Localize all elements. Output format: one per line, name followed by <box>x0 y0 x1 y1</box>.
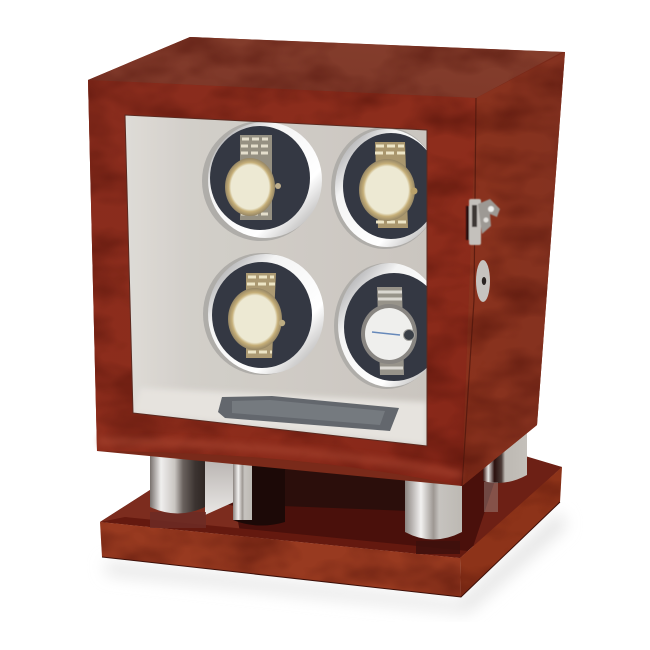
crown <box>275 183 281 189</box>
watch bracelet <box>375 142 408 228</box>
chrome ring <box>338 263 426 387</box>
winder top right <box>331 128 426 249</box>
watch face <box>228 288 282 350</box>
ring shadow <box>334 263 416 389</box>
background seen under cabinet <box>205 458 234 515</box>
cabinet top face <box>88 37 562 98</box>
latch dark detail <box>472 205 477 227</box>
base top face <box>100 463 562 558</box>
base top front lip <box>100 517 468 558</box>
watch bracelet <box>246 273 276 358</box>
plate <box>476 260 490 302</box>
window edge <box>125 115 427 446</box>
chrome ring <box>208 122 322 238</box>
post: front right <box>405 476 462 540</box>
watch bracelet <box>240 135 272 220</box>
chrome ring <box>208 254 324 374</box>
post: back right reflection <box>484 482 498 512</box>
keyhole <box>482 277 486 285</box>
post: front right reflection <box>416 541 460 554</box>
watch case <box>361 304 417 364</box>
latch shadow <box>466 206 470 240</box>
base right face <box>460 467 562 597</box>
watch face <box>225 158 275 216</box>
valet tray inner <box>232 400 385 425</box>
latch arm <box>478 199 500 234</box>
door gap <box>462 98 476 486</box>
crown <box>410 188 418 194</box>
valet tray <box>218 396 399 431</box>
watch bracelet <box>377 287 404 375</box>
cabinet front frame <box>88 80 476 486</box>
watch face <box>365 308 413 360</box>
latch lower highlight <box>484 218 488 222</box>
window <box>125 115 444 446</box>
base top right sheen <box>472 450 562 550</box>
cabinet <box>88 37 565 486</box>
key escutcheon <box>476 260 490 302</box>
dark cup <box>344 273 426 381</box>
post: front left <box>150 455 205 514</box>
watch hand <box>372 332 400 335</box>
window floor <box>133 388 427 446</box>
crown <box>404 330 414 340</box>
cabinet side face <box>462 52 565 486</box>
post: back right <box>483 430 527 483</box>
cabinet backing <box>88 37 565 486</box>
winder bottom left <box>203 253 324 375</box>
steel posts <box>150 430 527 554</box>
product illustration: watch winder cabinet <box>88 37 566 614</box>
chrome ring <box>335 129 426 247</box>
winder top left <box>202 121 322 241</box>
glass haze <box>210 126 426 431</box>
dark cup <box>210 126 310 230</box>
ring shadow <box>203 253 278 375</box>
latch plate <box>469 199 481 245</box>
floor shadow <box>104 512 566 612</box>
winder bottom right <box>334 263 426 389</box>
crown <box>279 320 285 326</box>
latch highlight <box>488 206 494 212</box>
post: middle rear <box>233 460 285 526</box>
base top left sheen <box>100 490 240 532</box>
latch hardware <box>466 199 500 245</box>
window back panel <box>125 115 427 446</box>
ring shadow <box>202 122 301 241</box>
highlight at lower frame edge <box>98 436 462 480</box>
dark recess <box>282 462 462 513</box>
dark cup <box>212 262 312 368</box>
base front face <box>100 522 461 597</box>
base plinth <box>100 450 562 597</box>
dark cup <box>343 133 426 239</box>
ring shadow <box>331 128 426 249</box>
post: front left reflection <box>150 512 206 528</box>
watch face <box>359 159 415 221</box>
